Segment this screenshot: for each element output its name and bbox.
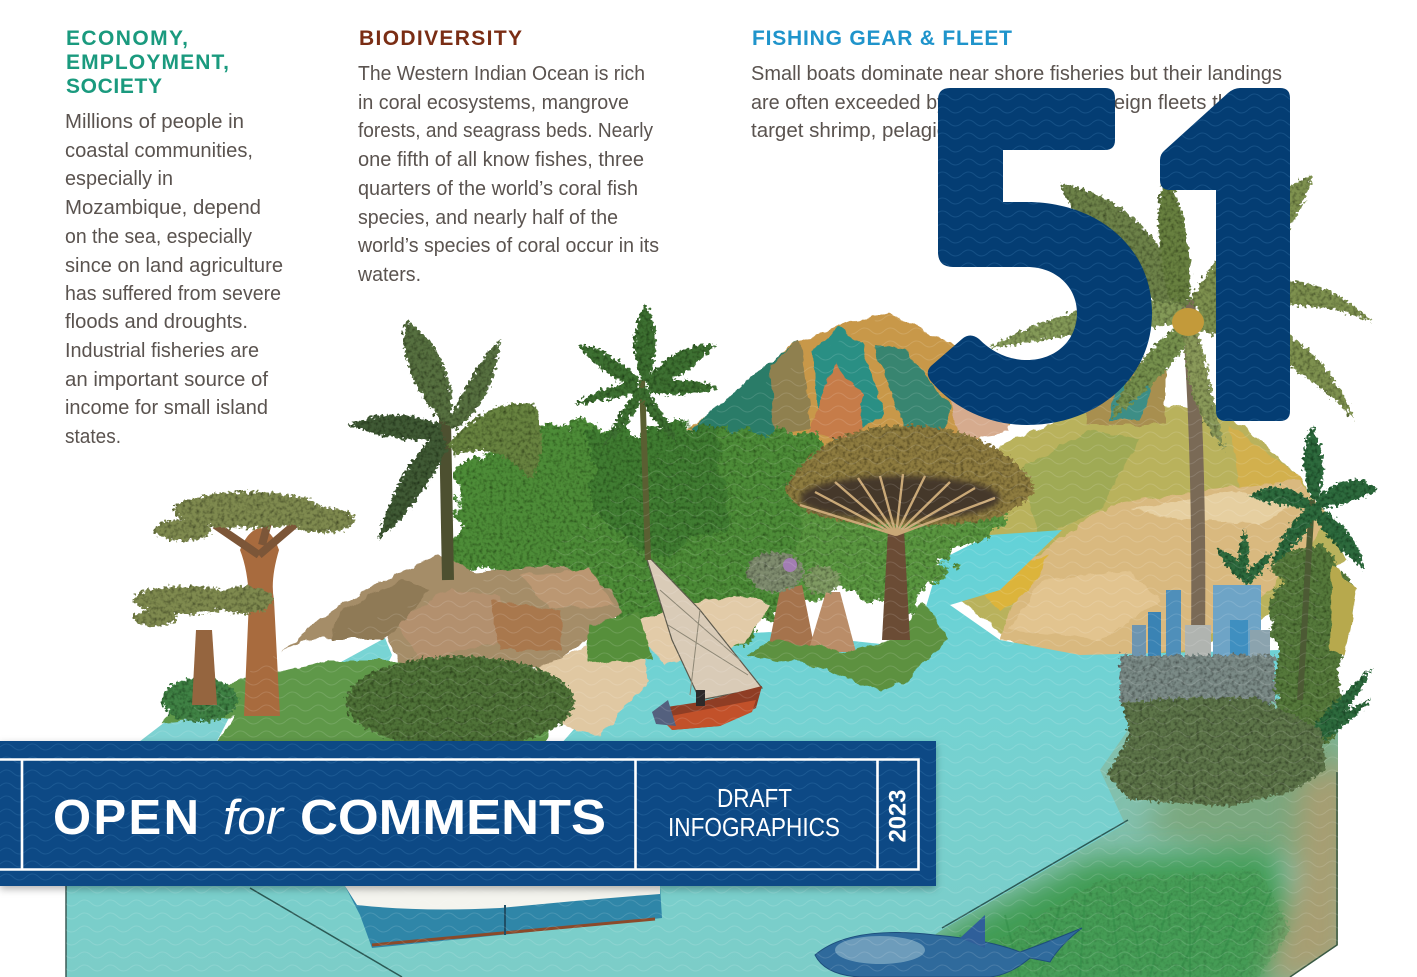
banner subtitle: DRAFT (717, 783, 792, 813)
body text: economy (65, 111, 283, 448)
baobab trees (133, 492, 560, 745)
banner year: 2023 (884, 790, 912, 842)
body text: economy: Mozambique, depend (65, 197, 261, 219)
fishing lines and map outline (66, 772, 1337, 977)
banner title (53, 791, 606, 845)
heading: economy, employment, society (66, 27, 229, 98)
body text: economy: an important source of (65, 369, 268, 391)
body text: economy: income for small island (65, 397, 268, 419)
banner: open for comments (0, 741, 936, 886)
body text: economy: since on land agriculture (65, 255, 283, 277)
dragon tree headland (745, 600, 948, 692)
patterned mountain (685, 312, 1010, 450)
left forest palms (348, 303, 718, 580)
body text: economy: on the sea, especially (65, 226, 252, 248)
body text: economy: states. (65, 426, 121, 448)
body text: economy: floods and droughts. (65, 311, 248, 333)
body text: economy: especially in (65, 168, 173, 190)
body text: economy: Millions of people in (65, 111, 244, 133)
fishing boat (345, 886, 662, 948)
mangrove bush (346, 656, 574, 748)
heading: economy, employment, society: ECONOMY, (66, 27, 188, 50)
heading: biodiversity: BIODIVERSITY (359, 27, 522, 50)
body text: biodiversity: waters. (357, 264, 421, 286)
banner title: COMMENTS (300, 791, 606, 845)
body text: biodiversity: in coral ecosystems, mangrove (358, 92, 629, 114)
body text: biodiversity (357, 63, 659, 286)
page number 51 (928, 88, 1290, 425)
lower right seagrass and sand shore (935, 698, 1338, 977)
heading: fishing gear and fleet: FISHING GEAR & FLEET (752, 27, 1012, 50)
banner title: OPEN (53, 791, 199, 845)
body text: fishing gear (751, 63, 1282, 142)
body text: fishing gear: target shrimp, pelagic (751, 120, 947, 142)
dhow sailing boat (645, 553, 762, 730)
body text: biodiversity: one fifth of all know fishes, three (358, 149, 644, 171)
body text: fishing gear: are often exceeded by (751, 92, 947, 114)
heading: economy, employment, society: SOCIETY (66, 75, 162, 98)
coastal city skyline (1120, 585, 1275, 703)
body text: biodiversity: species, and nearly half of the (358, 207, 618, 229)
body text: biodiversity: quarters of the world’s coral fish (358, 178, 638, 200)
panel: fishing gear and fleet (751, 27, 1282, 142)
beach sand (535, 595, 770, 735)
body text: biodiversity: The Western Indian Ocean is rich (358, 63, 645, 85)
sandy mountain backdrop (960, 360, 1345, 660)
panel: biodiversity (357, 27, 659, 286)
banner subtitle (668, 783, 840, 842)
wave texture overlay (66, 312, 1338, 977)
banner subtitle: INFOGRAPHICS (668, 812, 840, 842)
large coconut palm (985, 170, 1372, 640)
body text: biodiversity: forests, and seagrass beds. Nearly (358, 120, 653, 142)
body text: fishing gear: foreign fleets that (1090, 92, 1246, 114)
sea (66, 530, 1280, 977)
body text: economy: coastal communities, (65, 140, 253, 162)
bottle trees (747, 552, 856, 652)
body text: economy: has suffered from severe (65, 283, 281, 305)
body text: economy: Industrial fisheries are (65, 340, 259, 362)
right side palms (1217, 425, 1378, 742)
rocky shore (280, 556, 622, 668)
body text: biodiversity: world’s species of coral occur in its (357, 235, 659, 257)
heading: economy, employment, society: EMPLOYMENT, (66, 51, 229, 74)
panel: economy, employment, society (65, 27, 283, 448)
banner title: for (223, 791, 285, 845)
body text: fishing gear: Small boats dominate near shore fisheries but their landings (751, 63, 1282, 85)
panel: coastal illustration (66, 170, 1378, 977)
whale shark (815, 915, 1082, 977)
dragon tree (785, 425, 1035, 640)
shoreline shrubs (1106, 698, 1326, 806)
tropical forest (450, 425, 1010, 640)
